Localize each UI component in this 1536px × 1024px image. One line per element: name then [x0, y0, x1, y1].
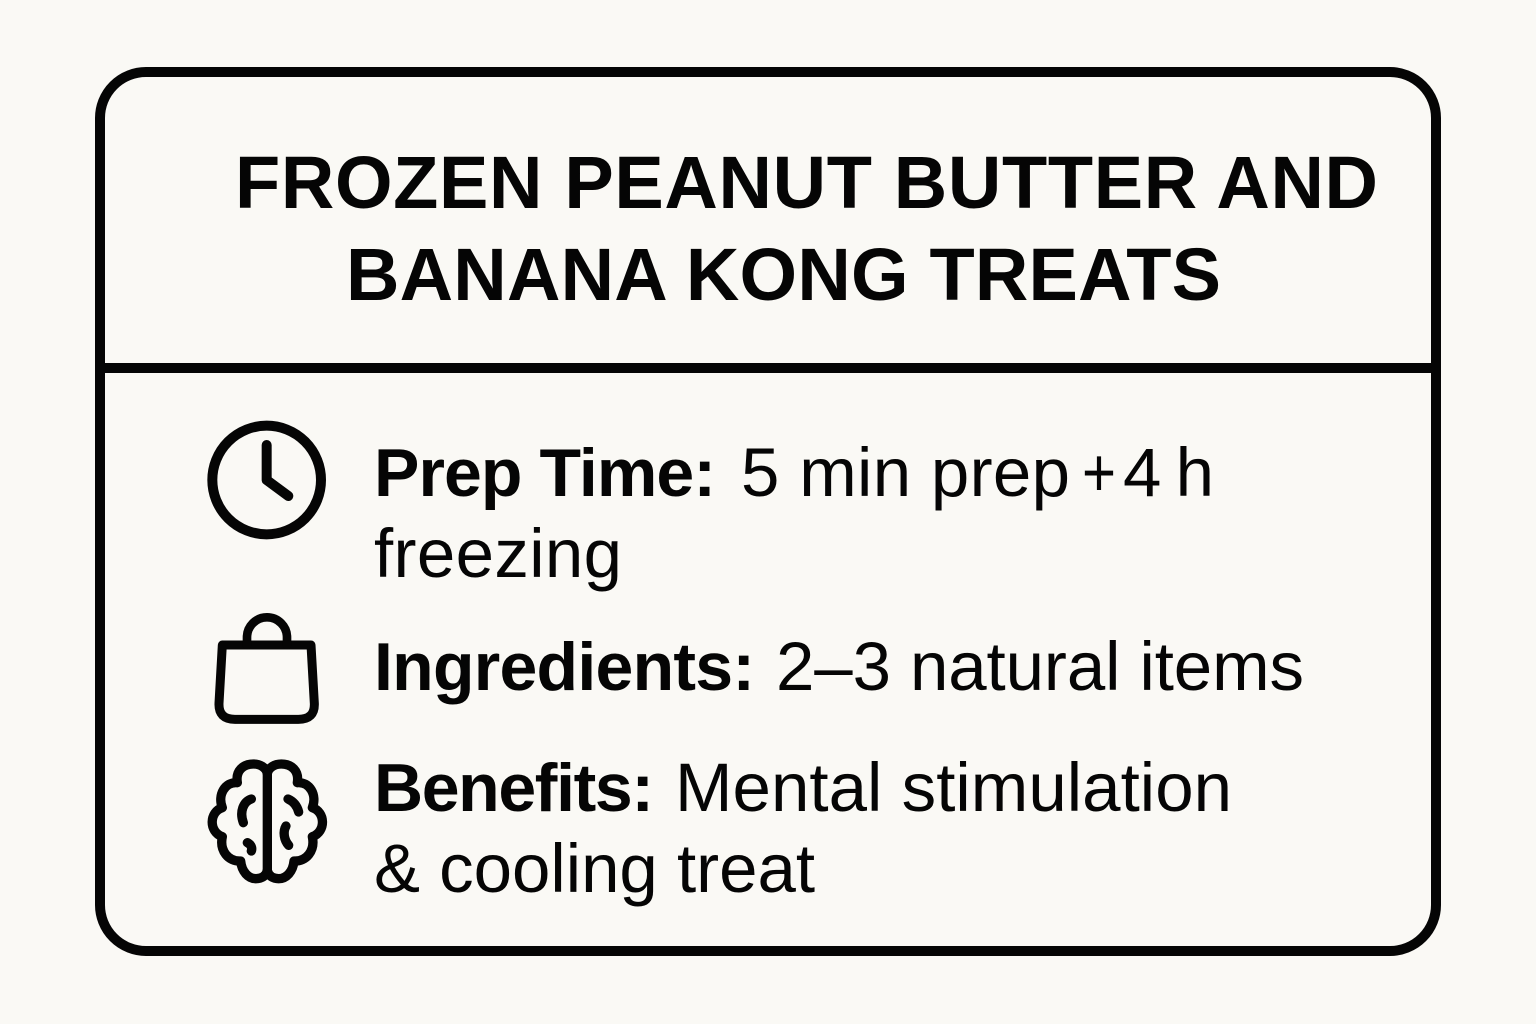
text: benefits [374, 749, 1232, 907]
text: ingredients [374, 628, 1304, 705]
text: prep time: + [1082, 434, 1116, 511]
text: ingredients: Ingredients: [374, 629, 755, 705]
title: FROZEN PEANUT BUTTER AND [235, 141, 1378, 224]
text: benefits: & cooling treat [374, 830, 815, 907]
text: prep time: 5 min prep [741, 434, 1070, 511]
icon: shopping bag [219, 617, 314, 719]
icon: clock [212, 426, 321, 534]
text: ingredients: 2–3 natural items [776, 628, 1304, 705]
text: benefits: Benefits: [374, 750, 654, 826]
text: prep time: freezing [374, 515, 622, 592]
text: benefits: Mental stimulation [675, 749, 1232, 826]
text: prep time: 4 h [1123, 434, 1214, 511]
icon: brain [212, 764, 322, 879]
title: BANANA KONG TREATS [346, 233, 1221, 316]
title [235, 141, 1378, 316]
panel: recipe card [100, 72, 1436, 951]
text: prep time: Prep Time: [374, 435, 716, 511]
text: prep time [374, 434, 1214, 592]
